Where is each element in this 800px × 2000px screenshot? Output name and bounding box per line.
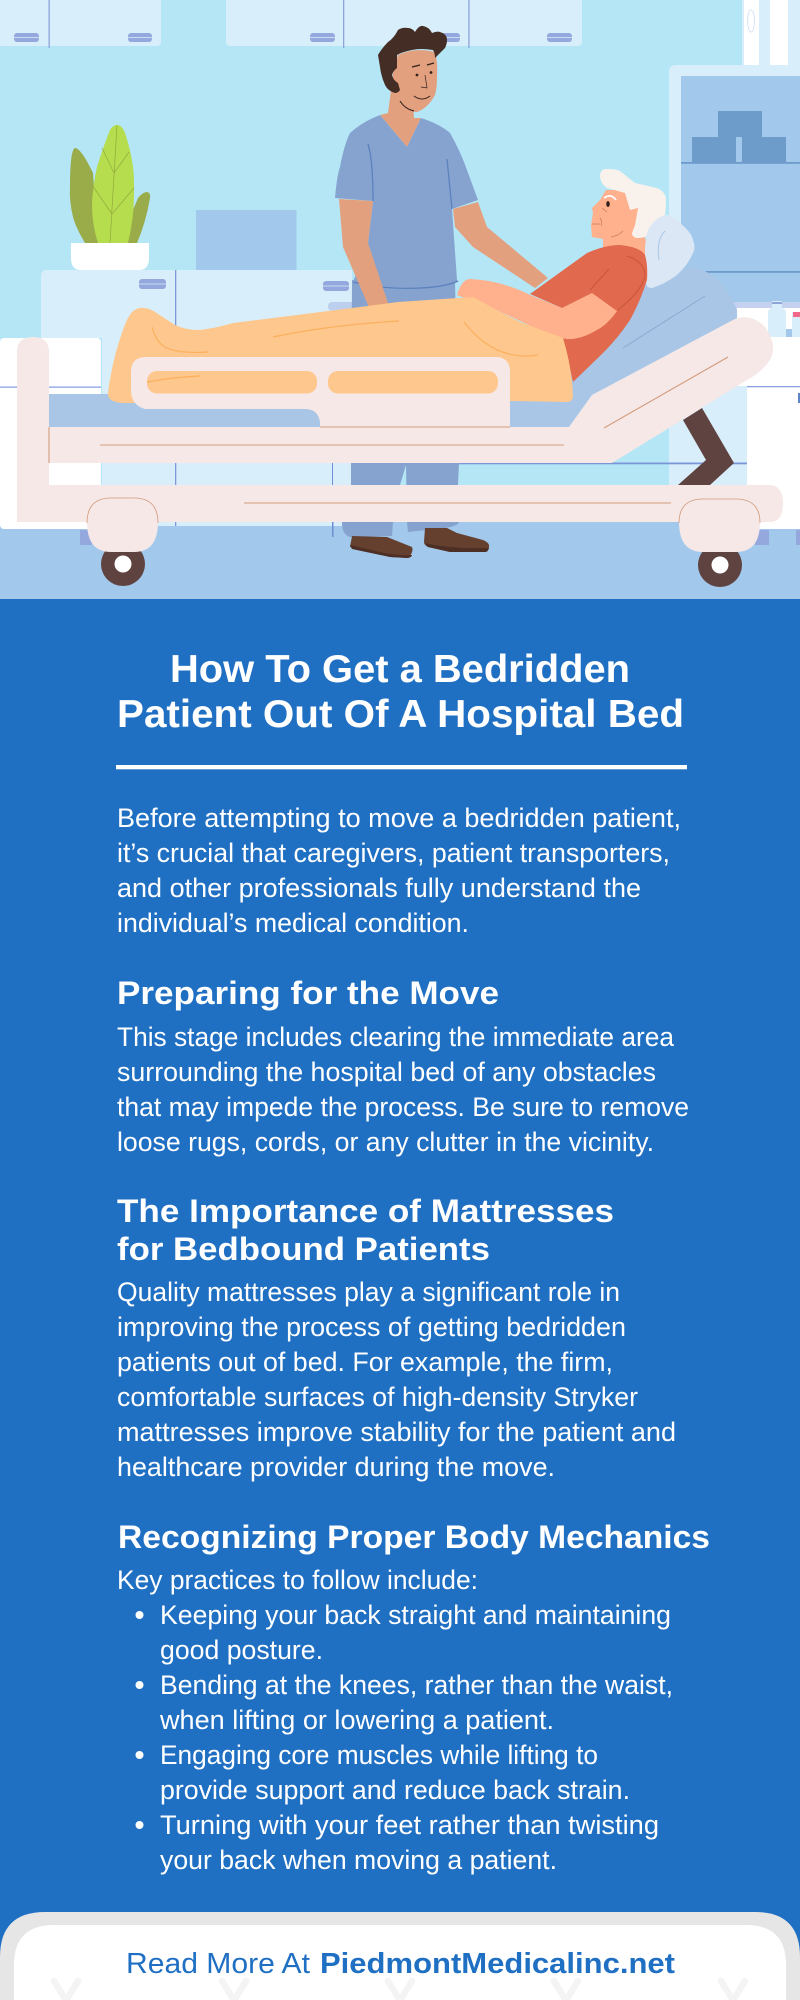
text block: introduction (117, 803, 681, 938)
footer call to action: Read More At (126, 1948, 310, 1980)
section: preparing for the move (117, 975, 689, 1157)
section: importance of mattresses (117, 1193, 676, 1482)
heading: Recognizing Proper Body Mechanics (118, 1519, 710, 1555)
body text: comfortable surfaces of high-density Stryker (117, 1382, 638, 1412)
nurse shoes (350, 528, 489, 558)
nurse arm right (453, 202, 548, 288)
wheels (101, 542, 742, 587)
lower cabinet behind bed (41, 270, 769, 545)
section: proper body mechanics (117, 1519, 710, 1875)
patient hair (600, 169, 666, 238)
footer inner card (14, 1925, 786, 2000)
right white cabinet with bottles (733, 301, 800, 545)
body text: that may impede the process. Be sure to remove (117, 1092, 689, 1122)
bullet: turning with feet: your back when moving a patient. (160, 1845, 557, 1875)
nurse neck (380, 90, 421, 147)
bullet: bend knees: when lifting or lowering a patient. (159, 1705, 554, 1735)
body text: mattresses improve stability for the patient and (117, 1417, 676, 1447)
nurse hair (378, 26, 447, 93)
rail openings (147, 371, 498, 394)
nurse face details (400, 63, 434, 111)
patient pillow (645, 215, 694, 288)
bullet: back straight: Keeping your back straight and maintaining (160, 1600, 671, 1630)
bullet: turning with feet (136, 1810, 659, 1875)
lead-in text: Key practices to follow include: (117, 1565, 478, 1595)
bullet: back straight (136, 1600, 671, 1665)
bullet: core muscles (136, 1740, 630, 1805)
body text: This stage includes clearing the immediate area (117, 1022, 674, 1052)
body text: loose rugs, cords, or any clutter in the vicinity. (117, 1127, 654, 1157)
bullet: bend knees: Bending at the knees, rather than the waist, (160, 1670, 673, 1700)
text block: introduction: it’s crucial that caregivers, patient transporters, (117, 838, 670, 868)
body text (117, 1022, 689, 1157)
body text (117, 1277, 676, 1482)
icon: potted plant (70, 125, 150, 270)
heading (117, 1193, 614, 1267)
decorative crosses (54, 1981, 745, 2000)
patient figure (457, 169, 694, 382)
hospital bed (17, 317, 783, 587)
body text: patients out of bed. For example, the firm, (117, 1347, 613, 1377)
patient face and neck (591, 190, 646, 256)
nurse figure (335, 26, 548, 558)
window and right wall cabinet (669, 0, 800, 522)
bullet: turning with feet: Turning with your feet rather than twisting (160, 1810, 659, 1840)
body text: Quality mattresses play a significant role in (117, 1277, 620, 1307)
nurse scrub top (335, 115, 478, 289)
bullet list (136, 1600, 673, 1875)
bullet: core muscles: provide support and reduce back strain. (160, 1775, 630, 1805)
bed frame (17, 317, 783, 522)
shirt folds (590, 256, 645, 310)
patient arm (457, 279, 617, 339)
footer call to action (126, 1948, 675, 1980)
body text: healthcare provider during the move. (117, 1452, 555, 1482)
pillow crease (658, 231, 665, 260)
blanket (108, 297, 573, 403)
bullet: core muscles: Engaging core muscles while lifting to (160, 1740, 598, 1770)
title divider (116, 765, 687, 769)
panel: hospital room illustration (0, 0, 800, 600)
panel: blue content background (0, 599, 800, 2000)
left white cabinet (0, 338, 101, 529)
heading: Preparing for the Move (117, 975, 499, 1011)
nurse head (391, 50, 437, 112)
body text: surrounding the hospital bed of any obstacles (117, 1057, 656, 1087)
mattress and backrest cushion (49, 267, 737, 427)
text block: introduction: individual’s medical condition. (117, 908, 469, 938)
title: Patient Out Of A Hospital Bed (117, 693, 684, 736)
bullet: bend knees (136, 1670, 673, 1735)
wall box (196, 210, 296, 270)
heading: The Importance of Mattresses (117, 1193, 614, 1229)
frame lines (49, 357, 728, 503)
nurse arm left (339, 199, 390, 340)
title: How To Get a Bedridden (170, 648, 630, 691)
patient shirt (530, 245, 647, 382)
caster covers (87, 498, 760, 552)
room wall and floor (0, 0, 800, 600)
text block: introduction: and other professionals fully understand the (117, 873, 641, 903)
body text: improving the process of getting bedridden (117, 1312, 626, 1342)
heading: for Bedbound Patients (117, 1231, 490, 1267)
title (117, 648, 684, 736)
support leg (678, 408, 734, 485)
bullet: back straight: good posture. (160, 1635, 323, 1665)
footer call to action: PiedmontMedicalinc.net (320, 1948, 675, 1980)
patient face details (592, 196, 623, 237)
footer border (0, 1912, 800, 2000)
nurse trousers (342, 280, 459, 537)
side rail (131, 357, 510, 428)
upper cabinets (0, 0, 582, 48)
panel: footer card (0, 1912, 800, 2000)
scrub seams (353, 144, 458, 288)
text block: introduction: Before attempting to move a bedridden patient, (117, 803, 681, 833)
